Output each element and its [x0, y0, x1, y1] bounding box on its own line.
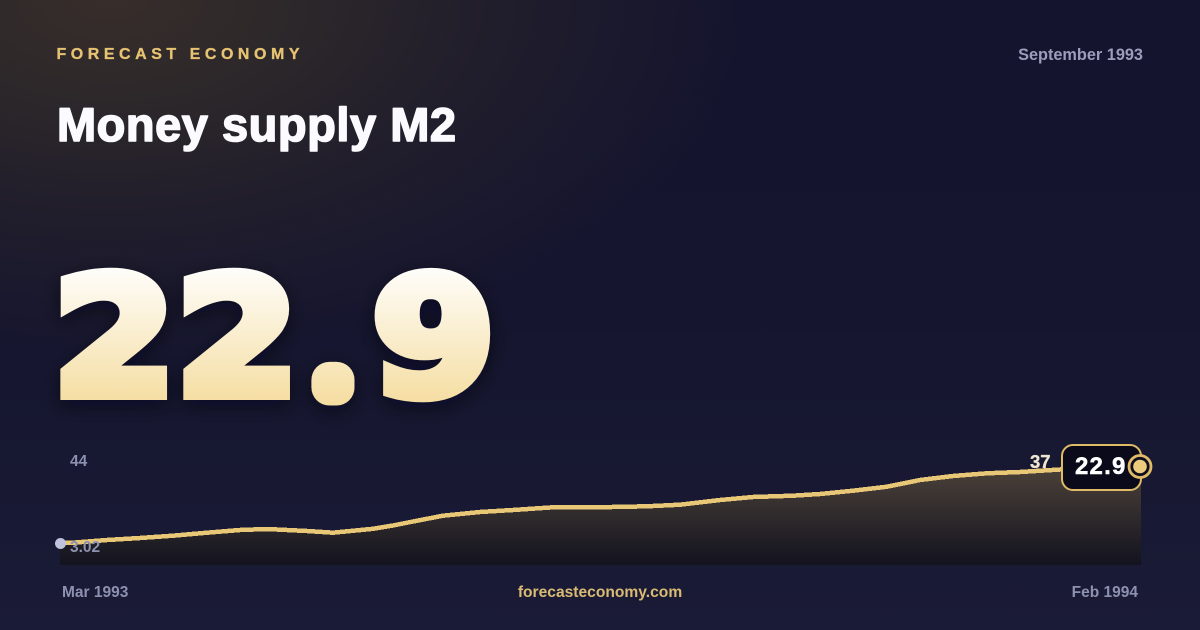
- brand label: FORECAST ECONOMY: [56, 46, 300, 63]
- current value callout: 22.9: [1075, 453, 1127, 480]
- line series: [60, 466, 1141, 543]
- area fill: [60, 466, 1141, 565]
- date label: September 1993: [1018, 46, 1143, 64]
- start point marker: [55, 538, 66, 549]
- axis min label: 3.02: [70, 539, 100, 556]
- current point marker: [1129, 456, 1151, 478]
- big value: [53, 244, 495, 432]
- big value: 2: [53, 244, 176, 432]
- area chart: [60, 466, 1141, 565]
- start date label: Mar 1993: [62, 584, 129, 601]
- big value: 2: [176, 244, 299, 432]
- peak value label: 37: [1030, 451, 1051, 472]
- axis max label: 44: [70, 453, 88, 470]
- end date label: Feb 1994: [1072, 584, 1138, 601]
- current value callout: [1062, 445, 1141, 490]
- big value: 9: [372, 244, 495, 432]
- title: Money supply M2: [57, 98, 456, 151]
- big value: .: [325, 352, 341, 398]
- website label: forecasteconomy.com: [518, 584, 682, 601]
